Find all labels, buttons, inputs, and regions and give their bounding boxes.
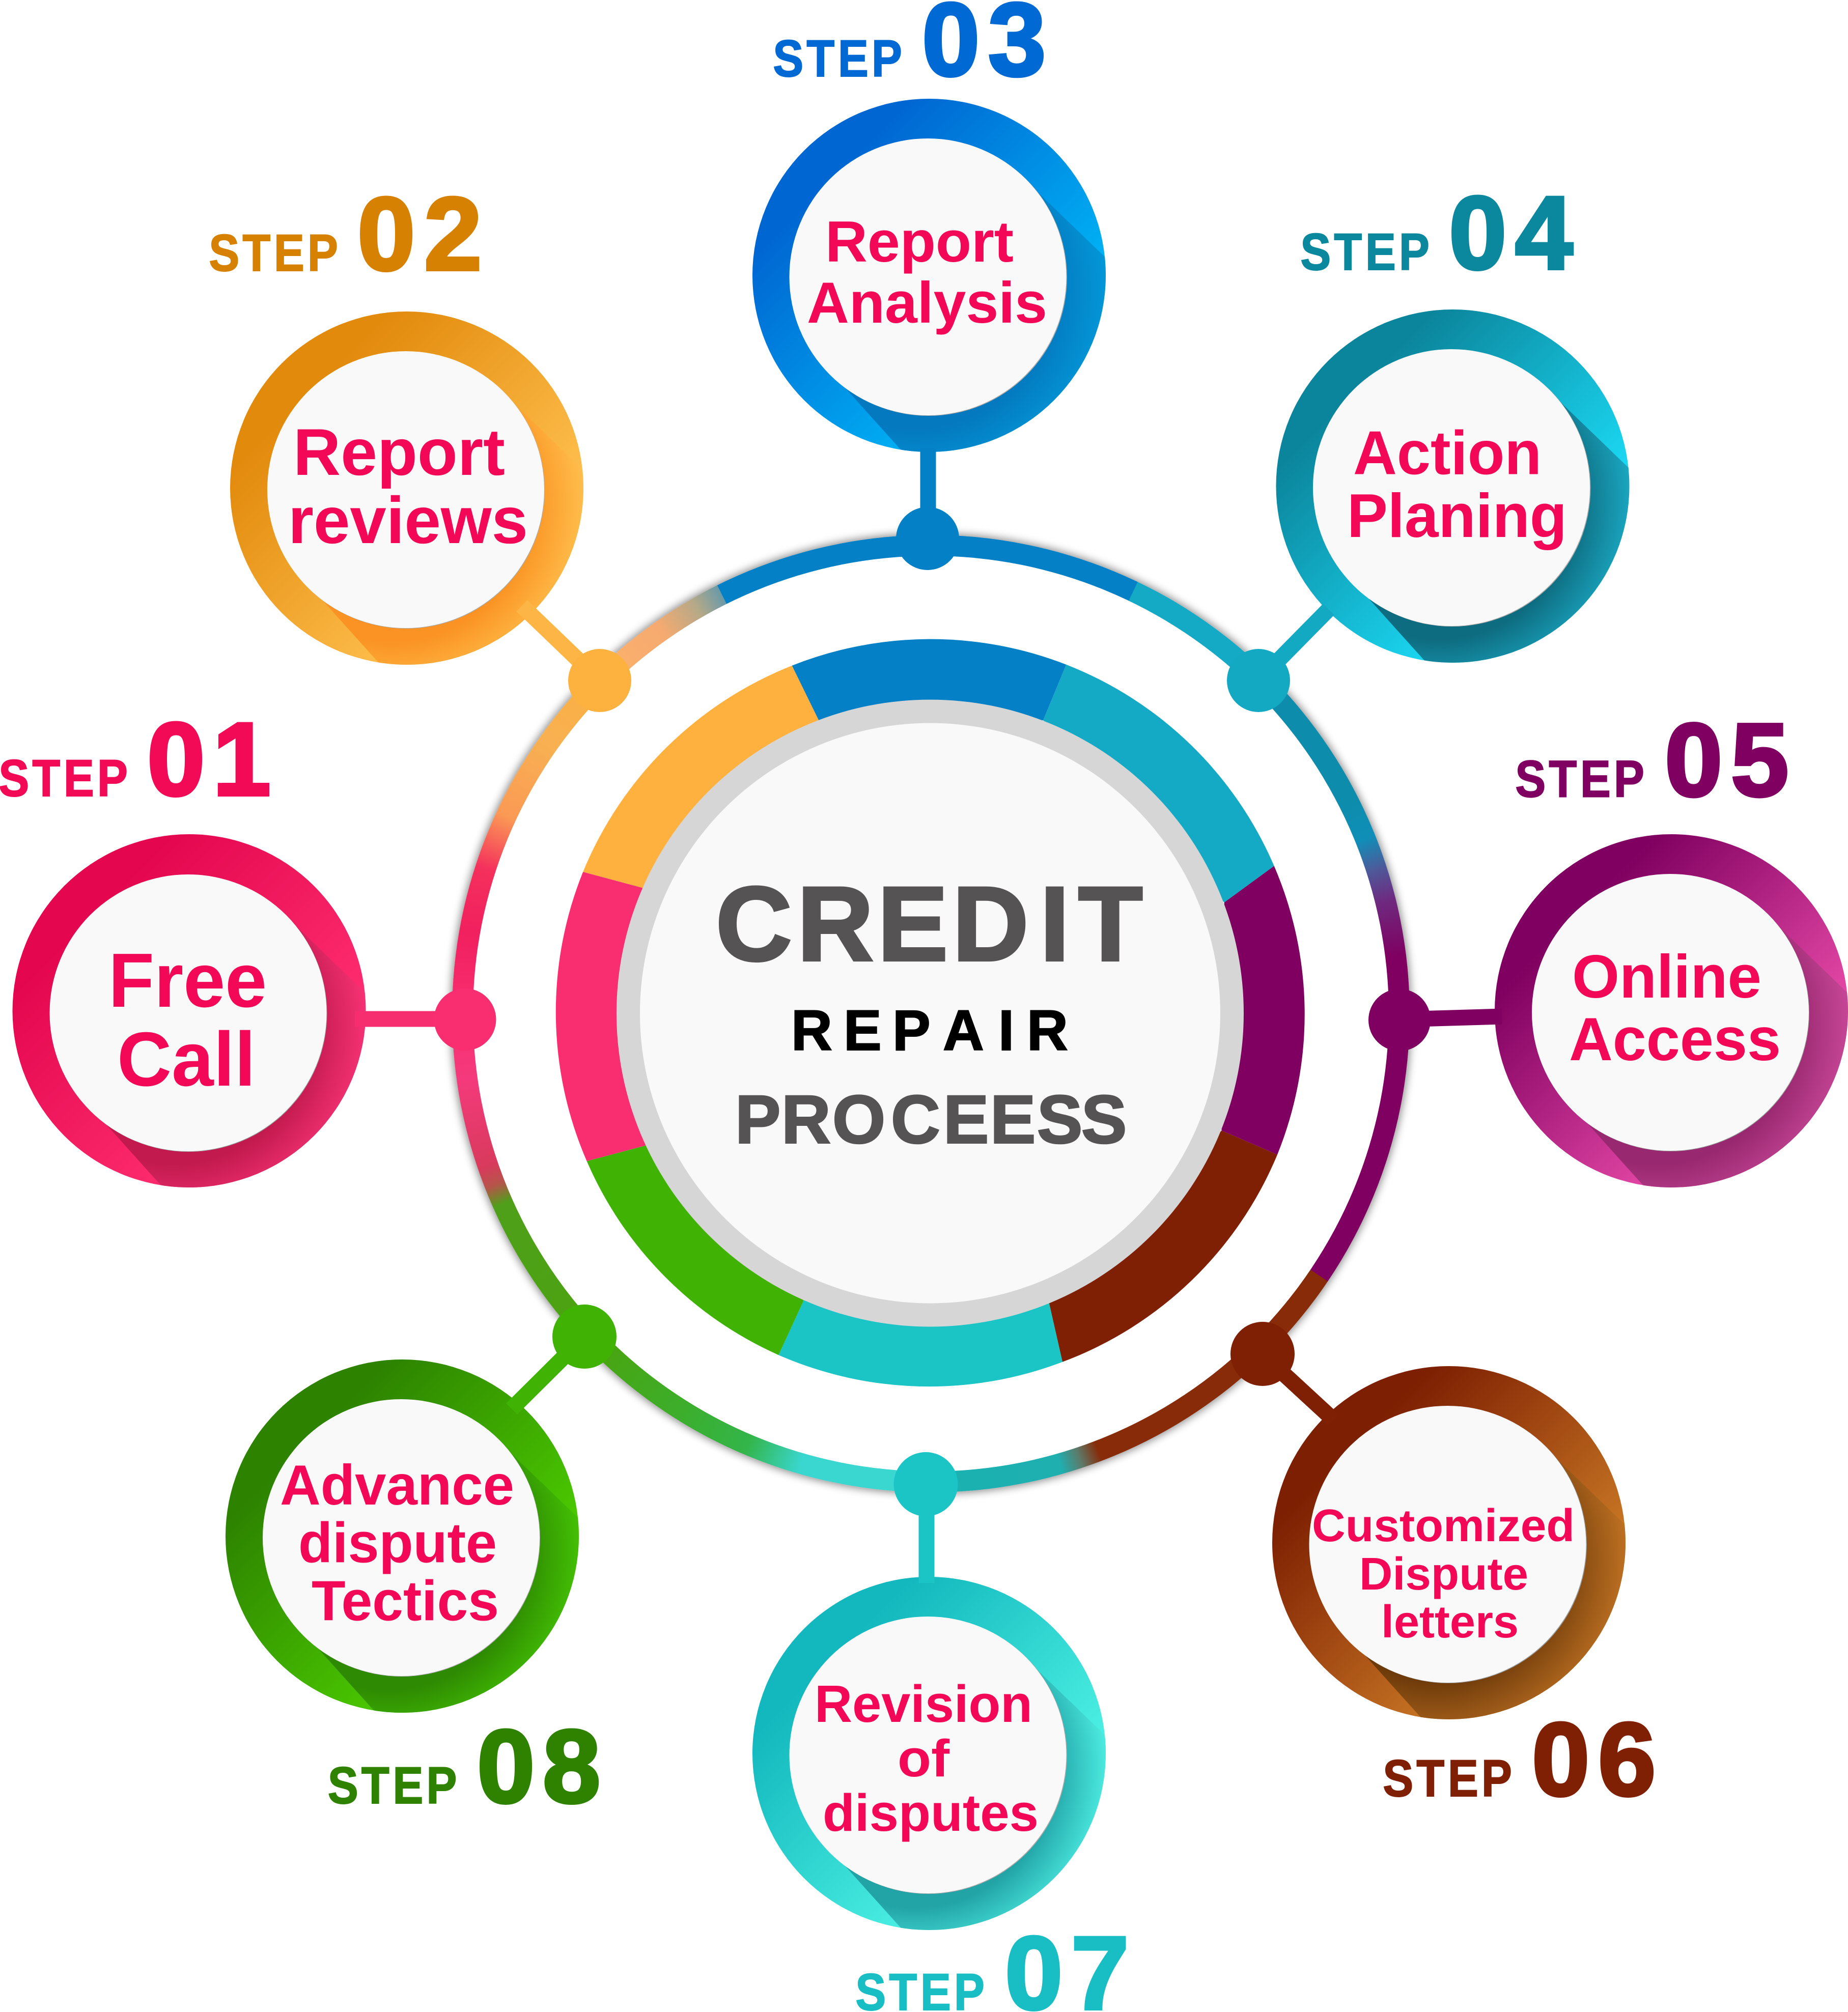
step 03 badge ring xyxy=(752,99,1106,452)
step 06: Customized Dispute letters xyxy=(1230,1322,1663,1818)
step 03 label xyxy=(807,210,1047,335)
step 03 node xyxy=(896,507,959,570)
step 06 node xyxy=(1230,1322,1295,1386)
step 05: Online Access xyxy=(1368,722,1848,1187)
step 06 heading: 06 xyxy=(1532,1702,1656,1818)
step 07: Revision of disputes xyxy=(752,1452,1143,2012)
orbit ring: multi-colour outer circle xyxy=(452,534,1409,1492)
step 04 badge ring xyxy=(1276,309,1629,663)
step 07 label: of xyxy=(898,1729,950,1788)
step 03 connector xyxy=(920,448,936,539)
step 05 label xyxy=(1569,943,1781,1073)
step 08 heading: STEP xyxy=(328,1757,457,1815)
step 03: Report Analysis xyxy=(752,0,1143,570)
step 02 badge ring xyxy=(230,311,583,665)
step 03 label: Report xyxy=(825,210,1014,274)
step 01 label: Call xyxy=(117,1016,256,1102)
centre wheel: eight coloured segments xyxy=(556,639,1305,1386)
step 06 heading xyxy=(1383,1702,1656,1818)
step 01 badge ring xyxy=(12,834,366,1187)
step 04 heading: STEP xyxy=(1300,223,1430,281)
step 08 heading: 08 xyxy=(477,1709,600,1825)
step 04 heading: 04 xyxy=(1449,175,1573,291)
step 06 label: Dispute xyxy=(1359,1549,1528,1600)
step 05 heading: 05 xyxy=(1665,702,1788,818)
step 02 label xyxy=(288,415,528,557)
step 04 label xyxy=(1347,418,1567,550)
step 07 connector xyxy=(918,1484,935,1583)
step 06 label: letters xyxy=(1381,1597,1519,1648)
step 07 label: disputes xyxy=(823,1783,1039,1842)
step 02 heading: 02 xyxy=(357,176,482,292)
step 05 heading: STEP xyxy=(1515,750,1644,808)
step 07 badge ring xyxy=(752,1577,1143,1967)
step 06 label: Customized xyxy=(1312,1500,1575,1551)
step 01 label xyxy=(108,937,267,1102)
step 04 heading xyxy=(1300,175,1573,291)
step 02 label: Report xyxy=(293,415,505,489)
step 04 label: Action xyxy=(1353,418,1542,488)
step 08: Advance dispute Tectics xyxy=(226,1305,617,1825)
centre disc with title xyxy=(617,700,1244,1327)
step 06 badge ring xyxy=(1272,1366,1626,1719)
step 06 heading: STEP xyxy=(1383,1750,1512,1807)
step 02 label: reviews xyxy=(288,483,528,557)
step 01 label: Free xyxy=(108,937,267,1023)
step 05 connector xyxy=(1399,1016,1502,1019)
step 03 heading xyxy=(773,0,1046,98)
step 07 heading xyxy=(855,1915,1129,2012)
step 02 node xyxy=(568,649,631,712)
step 07 node xyxy=(894,1452,958,1516)
step 07 label: Revision xyxy=(815,1675,1032,1733)
step 04 label: Planing xyxy=(1347,481,1567,550)
step 01 heading xyxy=(0,701,270,817)
step 02 heading xyxy=(209,176,482,292)
step 02 heading: STEP xyxy=(209,224,338,282)
step 01 heading: 01 xyxy=(147,701,270,817)
step 08 heading xyxy=(328,1709,600,1825)
step 08 node xyxy=(552,1305,617,1369)
step 08 label: Tectics xyxy=(312,1570,499,1633)
step 03 label: Analysis xyxy=(807,271,1047,335)
step 01: Free Call xyxy=(0,721,496,1187)
step 01 node xyxy=(434,988,496,1051)
step 05 label: Online xyxy=(1572,943,1761,1011)
title: PROCEESS: PROCEESS xyxy=(735,1082,1127,1157)
step 08 label xyxy=(280,1454,514,1633)
title: REPAIR: REPAIR xyxy=(791,999,1068,1062)
step 06 connector xyxy=(1262,1354,1334,1420)
step 02 connector xyxy=(522,606,600,681)
step 04: Action Planing xyxy=(1227,194,1629,712)
step 08 label: dispute xyxy=(298,1511,497,1574)
step 03 heading: STEP xyxy=(773,30,902,88)
step 04 node xyxy=(1227,649,1290,712)
step 05 node xyxy=(1368,989,1431,1051)
step 08 label: Advance xyxy=(280,1454,514,1517)
step 05 label: Access xyxy=(1569,1005,1781,1073)
step 05 badge ring xyxy=(1495,834,1848,1225)
step 02: Report reviews xyxy=(209,176,631,712)
step 06 label xyxy=(1312,1500,1575,1648)
step 01 connector xyxy=(355,1011,465,1027)
step 08 connector xyxy=(512,1337,584,1409)
step 04 connector xyxy=(1258,609,1329,681)
title: CREDIT: CREDIT xyxy=(716,865,1142,983)
step 05 heading xyxy=(1515,702,1788,818)
step 08 badge ring xyxy=(226,1359,616,1750)
step 01 heading: STEP xyxy=(0,750,128,807)
step 07 label xyxy=(815,1675,1039,1842)
